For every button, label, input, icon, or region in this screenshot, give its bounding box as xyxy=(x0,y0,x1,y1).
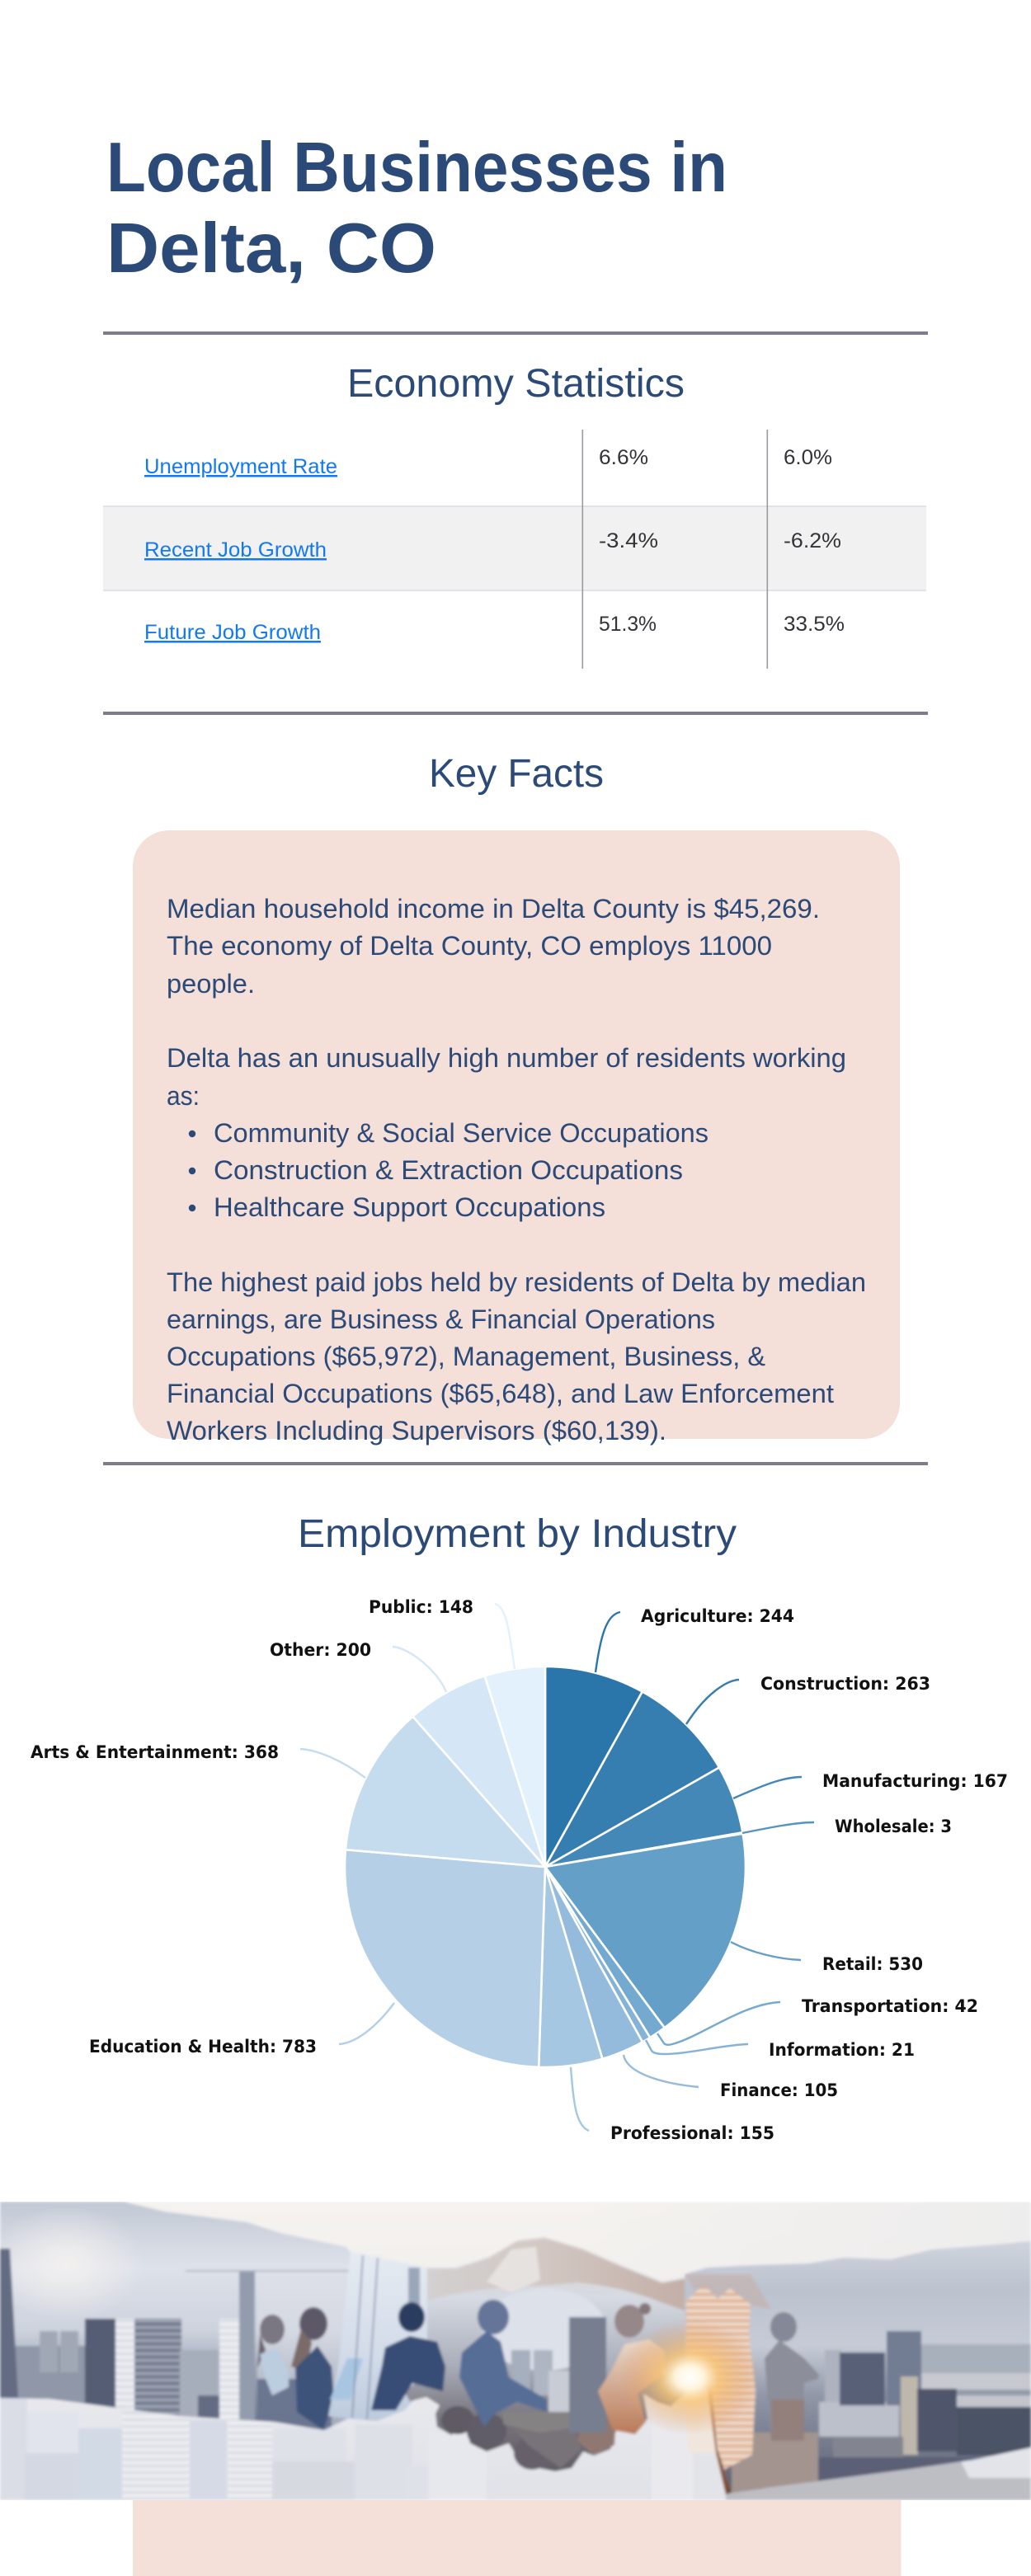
row: future job growth: Future Job Growth xyxy=(144,621,321,644)
slice labels: Finance: 105 xyxy=(720,2080,838,2100)
row: unemployment rate: 6.6% xyxy=(599,446,648,469)
slice labels: Retail: 530 xyxy=(822,1954,923,1974)
row: recent job growth: -6.2% xyxy=(784,529,841,552)
text: highest paid jobs: earnings, are Business & Financial Operations xyxy=(167,1304,715,1334)
text: highest paid jobs: Occupations ($65,972), Management, Business, & xyxy=(167,1342,765,1371)
connector lines xyxy=(300,1604,814,2131)
man in blue suit, side view xyxy=(459,2300,547,2427)
bullet list: Community & Social Service Occupations xyxy=(214,1118,709,1148)
panel: economy statistics table xyxy=(103,430,926,669)
text: highest paid jobs: The highest paid jobs held by residents of Delta by median xyxy=(167,1267,866,1297)
text: income and employment: The economy of Delta County, CO employs 11000 xyxy=(167,931,772,961)
text: income and employment xyxy=(167,894,820,999)
slice labels: Other: 200 xyxy=(270,1640,371,1660)
bullet list xyxy=(189,1118,709,1222)
bullet list: Construction & Extraction Occupations xyxy=(214,1155,683,1185)
row: unemployment rate: 6.0% xyxy=(784,446,832,469)
man on phone xyxy=(765,2312,819,2441)
slice labels: Education & Health: 783 xyxy=(89,2037,317,2057)
heading: Employment by Industry: Employment by Industry xyxy=(298,1512,737,1556)
slice labels: Wholesale: 3 xyxy=(835,1817,952,1836)
image: handshake over city skyline xyxy=(0,2202,1031,2500)
shirt cuff xyxy=(328,2251,427,2421)
pie slices xyxy=(345,1666,746,2067)
heading: Economy Statistics: Economy Statistics xyxy=(347,362,685,406)
businesswoman right xyxy=(291,2307,334,2430)
chart: employment by industry pie xyxy=(31,1597,1008,2143)
row: future job growth: 33.5% xyxy=(784,613,845,636)
row: recent job growth: -3.4% xyxy=(599,529,658,552)
ghost city below the arms xyxy=(0,2395,1031,2500)
man in dark suit, back view xyxy=(371,2302,445,2410)
row: unemployment rate xyxy=(144,446,832,478)
title xyxy=(106,129,727,288)
slice labels: Transportation: 42 xyxy=(802,1996,978,2016)
slice labels xyxy=(31,1597,1008,2143)
slice labels: Manufacturing: 167 xyxy=(822,1771,1008,1791)
slice labels: Information: 21 xyxy=(769,2040,915,2060)
panel: bottom peach block xyxy=(133,2500,901,2576)
text: unusually high occupations: Delta has an unusually high number of residents working xyxy=(167,1043,846,1073)
businesswoman left xyxy=(257,2315,289,2395)
title: Local Businesses in xyxy=(106,129,727,207)
woman in light jacket xyxy=(598,2303,666,2434)
slice labels: Professional: 155 xyxy=(610,2123,774,2143)
clasped hands xyxy=(404,2237,693,2471)
row: future job growth: 51.3% xyxy=(599,613,657,636)
left sleeve with city and team xyxy=(0,2202,355,2437)
panel: key facts xyxy=(133,830,900,1445)
central city buildings xyxy=(503,2317,606,2433)
sun flare xyxy=(626,2323,756,2433)
text: income and employment: Median household income in Delta County is $45,269. xyxy=(167,894,820,924)
text: highest paid jobs xyxy=(167,1267,866,1445)
bullet list: Healthcare Support Occupations xyxy=(214,1192,605,1222)
text: highest paid jobs: Financial Occupations ($65,648), and Law Enforcement xyxy=(167,1379,834,1408)
slice labels: Public: 148 xyxy=(369,1597,473,1617)
slice labels: Arts & Entertainment: 368 xyxy=(31,1742,279,1762)
right sleeve with city xyxy=(685,2239,1031,2498)
row: recent job growth: Recent Job Growth xyxy=(144,538,327,562)
slice labels: Agriculture: 244 xyxy=(641,1606,794,1626)
text: unusually high occupations xyxy=(167,1043,846,1111)
text: income and employment: people. xyxy=(167,969,255,999)
orange striped tower xyxy=(685,2287,756,2494)
text: highest paid jobs: Workers Including Supervisors ($60,139). xyxy=(167,1416,666,1445)
row: unemployment rate: Unemployment Rate xyxy=(144,455,337,478)
row: future job growth xyxy=(144,613,845,644)
heading: Key Facts: Key Facts xyxy=(429,752,604,796)
title: Delta, CO xyxy=(106,209,436,288)
text: unusually high occupations: as: xyxy=(167,1081,200,1111)
slice labels: Construction: 263 xyxy=(760,1674,930,1694)
row: recent job growth xyxy=(144,529,841,562)
